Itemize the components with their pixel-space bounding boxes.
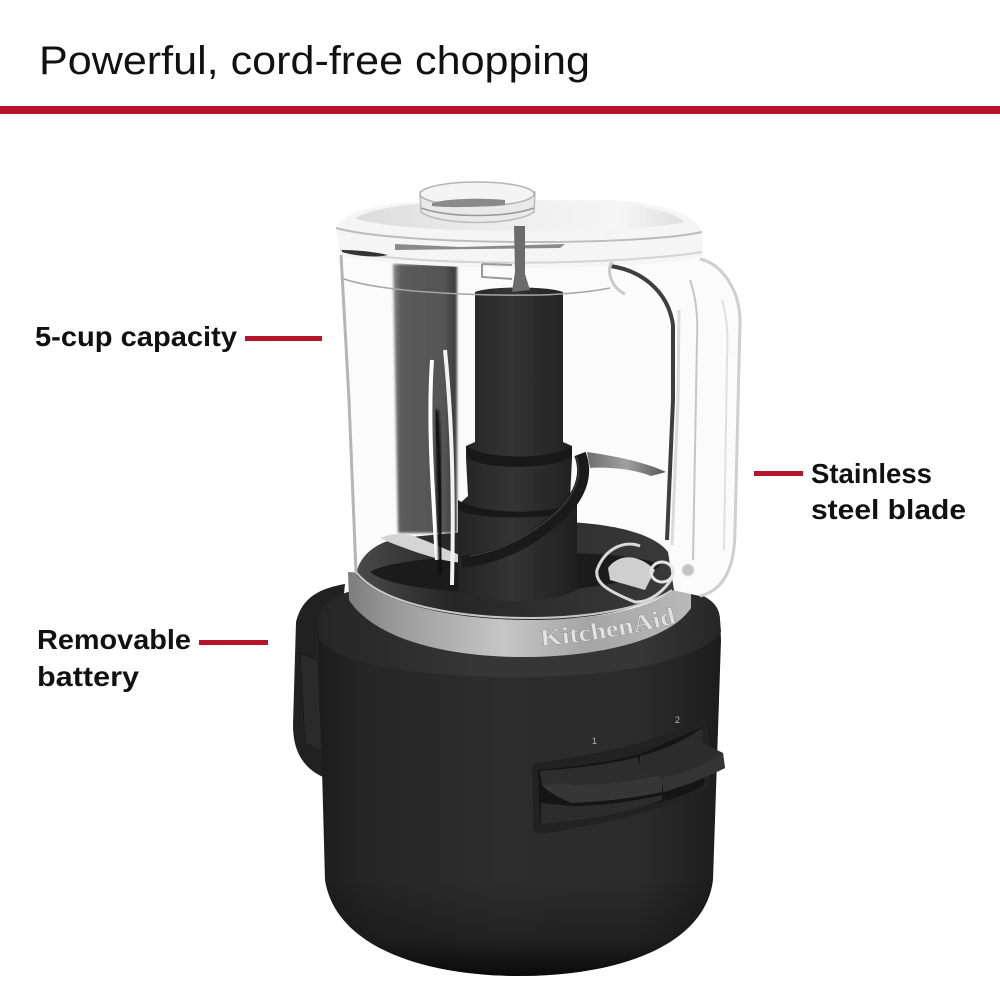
silver ring <box>348 572 691 657</box>
speed switch labels <box>592 715 680 746</box>
base shoulder <box>318 585 721 677</box>
jar rim band line <box>341 278 610 295</box>
gray reflection panel <box>393 264 457 533</box>
stainless blade <box>380 452 666 563</box>
jar lid <box>336 200 702 295</box>
tab 1 <box>540 757 662 803</box>
blade shaft <box>458 288 577 601</box>
motor base <box>318 585 721 976</box>
callout: removable battery: battery <box>37 661 139 692</box>
feed tube <box>420 182 535 222</box>
title: Powerful, cord-free chopping <box>39 39 590 83</box>
tab 2 <box>640 728 725 792</box>
lid latch shadow <box>342 250 388 256</box>
speed switch labels: 2 <box>675 715 680 725</box>
jar glass body <box>340 250 740 620</box>
blade guard band <box>462 454 583 562</box>
callout: removable battery: Removable <box>37 624 191 655</box>
callout: stainless steel blade <box>754 458 966 525</box>
speed switch <box>532 719 725 834</box>
callout: 5-cup capacity <box>35 321 322 352</box>
inner wall rib <box>430 350 453 585</box>
callout: stainless steel blade: steel blade <box>811 494 966 525</box>
speed switch labels: 1 <box>592 736 597 746</box>
KitchenAid logo: KitchenAid <box>540 607 677 646</box>
jar handle <box>610 259 740 596</box>
removable battery pack <box>293 584 345 778</box>
callout: stainless steel blade: Stainless <box>811 458 932 489</box>
jar left wall <box>341 255 356 572</box>
callout: 5-cup capacity: 5-cup capacity <box>35 321 237 352</box>
tab 1 lower <box>541 795 662 824</box>
shaft collar <box>466 446 572 467</box>
silver bowl rim line <box>356 572 672 618</box>
lid stem <box>512 226 530 292</box>
handle lock tab <box>597 544 694 602</box>
red header rule <box>0 106 1000 114</box>
food chopper product illustration <box>293 181 742 976</box>
callout: removable battery <box>37 624 268 692</box>
jar floor <box>356 522 674 620</box>
